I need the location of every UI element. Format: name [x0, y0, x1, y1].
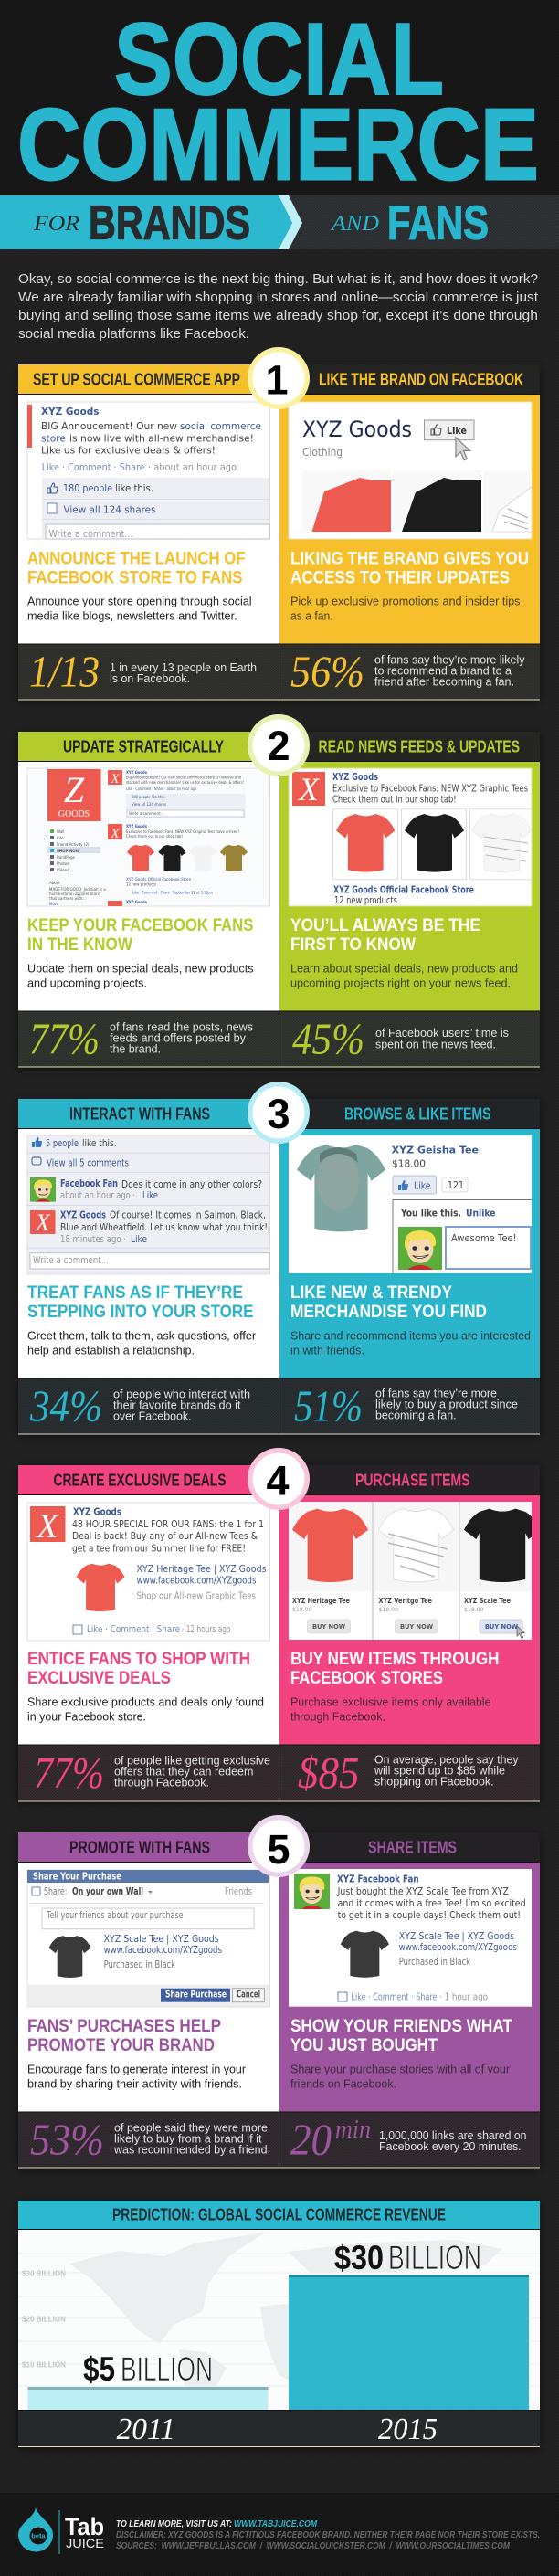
card: facebook post: Write a comment...	[49, 529, 133, 540]
card: news feed post: XYZ Goods Official Facebook Store	[333, 885, 474, 896]
card: share dialog: Share:	[44, 1886, 67, 1897]
text: share and recommend: Share and recommend items you are interested	[290, 1329, 531, 1343]
card: fan purchase story: Purchased in Black	[399, 1957, 471, 1968]
text: purchase exclusive items: through Facebook.	[290, 1710, 385, 1724]
stat: 20 min: 1,000,000 links are shared on	[379, 2129, 526, 2142]
heading: buy new items	[290, 1649, 499, 1688]
text: learn about deals: Learn about special deals, new products and	[290, 962, 518, 976]
card: facebook page thumbnail: Friend Activity (2)	[57, 842, 90, 847]
stat: 20 min: Facebook every 20 minutes.	[379, 2140, 522, 2153]
card: exclusive deal post: Deal is back! Buy any of our All-new Tees &	[72, 1531, 258, 1542]
text: share purchase stories: Share your purchase stories with all of your	[290, 2063, 511, 2076]
card: exclusive deal post: · 12 hours ago	[182, 1624, 230, 1635]
card: news feed post: Check them out in our shop tab!	[332, 794, 457, 805]
card: facebook post	[27, 402, 270, 540]
heading: buy new items: FACEBOOK STORES	[290, 1668, 443, 1688]
card: facebook page thumbnail: Z	[64, 769, 85, 810]
card: brand page with like button: XYZ Goods	[302, 417, 412, 442]
stat: 1/13: is on Facebook.	[110, 672, 190, 685]
text: learn about deals	[290, 962, 518, 990]
header: share items: SHARE ITEMS	[368, 1837, 457, 1856]
card: facebook post: like this.	[115, 483, 153, 494]
stat: 51%: 51%	[294, 1381, 363, 1431]
text: purchase exclusive items: Purchase exclusive items only available	[290, 1695, 491, 1709]
heading: entice fans	[27, 1649, 250, 1688]
card: exclusive deal post: 48 HOUR SPECIAL FOR OUR FANS: the 1 for 1	[72, 1519, 264, 1530]
card: store tees: BUY NOW	[485, 1623, 518, 1631]
text: greet them: Greet them, talk to them, ask questions, offer	[27, 1329, 257, 1343]
panel: step 4	[18, 1448, 541, 1803]
stat: $85: On average, people say they	[374, 1754, 519, 1767]
text: update them	[27, 962, 254, 990]
card: share dialog: www.facebook.com/XYZgoods	[104, 1945, 222, 1956]
text: purchase exclusive items	[290, 1695, 491, 1724]
card: facebook comments: Like	[131, 1234, 147, 1245]
chart axis labels: $30 BILLION	[22, 2269, 66, 2278]
stat: 77% exclusive offers	[34, 1747, 270, 1798]
card: facebook comments: 5 people	[46, 1138, 79, 1149]
card: facebook post: social commerce	[180, 421, 261, 432]
card: brand page with like button: Clothing	[302, 445, 343, 459]
text: share purchase stories	[290, 2063, 511, 2091]
card: fan purchase story: and it comes with a free Tee! I’m so excited	[338, 1898, 526, 1909]
card: fan purchase story: XYZ Facebook Fan	[337, 1874, 419, 1884]
heading: keep your fans in the know: KEEP YOUR FACEBOOK FANS	[27, 915, 254, 935]
card: facebook comments: like this.	[82, 1138, 117, 1149]
text: pick up promotions: as a fan.	[290, 609, 333, 623]
card: fan purchase story: XYZ Scale Tee | XYZ Goods	[399, 1931, 514, 1942]
card: share dialog: Share Your Purchase	[33, 1872, 121, 1883]
header: purchase items: PURCHASE ITEMS	[355, 1470, 469, 1489]
value: $30 billion: BILLION	[388, 2239, 481, 2276]
heading: entice fans: ENTICE FANS TO SHOP WITH	[27, 1649, 250, 1669]
heading: announce the launch: ANNOUNCE THE LAUNCH OF	[27, 548, 246, 568]
heading: show your friends: YOU JUST BOUGHT	[290, 2035, 438, 2055]
card: geisha tee product: XYZ Geisha Tee	[392, 1145, 479, 1156]
card: facebook page thumbnail: Wall	[57, 829, 64, 834]
stat: 20 min: min	[335, 2116, 371, 2144]
stat: 51%: of fans say they’re more	[375, 1387, 497, 1399]
card: share dialog: Share Purchase	[165, 1990, 227, 2001]
card: facebook post: Like · Comment · Share	[42, 462, 145, 473]
panel: step 2	[18, 714, 540, 1069]
card: facebook page thumbnail: stocked with new merchandise! Like us for exclusive deals & offers!	[126, 780, 244, 785]
banner: for brands and fans: FOR	[33, 212, 79, 235]
badge: step 1: 1	[265, 356, 289, 404]
card: geisha tee product: 121	[448, 1180, 464, 1191]
intro text: social media platforms like Facebook.	[18, 327, 249, 342]
text: encourage fans: Encourage fans to generate interest in your	[27, 2063, 247, 2076]
text: share exclusive products	[27, 1695, 264, 1724]
stat: 77% exclusive offers: offers that they can redeem	[114, 1766, 254, 1779]
panel: step 3	[18, 1082, 540, 1436]
card: share dialog: Tell your friends about your purchase	[46, 1910, 184, 1921]
card: fan purchase story: Like · Comment · Share	[351, 1991, 437, 2002]
card: facebook page thumbnail: Videos	[57, 868, 69, 872]
stat: 45%: spent on the news feed.	[375, 1038, 496, 1050]
icon: tab juice logo: Tab	[65, 2513, 104, 2540]
stat: 51%: becoming a fan.	[375, 1409, 457, 1421]
card: facebook post: 180 people	[63, 483, 112, 494]
stat: 1/13	[29, 647, 257, 697]
card: facebook comments: X	[35, 1209, 51, 1236]
card: store tees: $18.00	[464, 1606, 484, 1613]
card: fan purchase story	[289, 1869, 532, 2007]
badge: step 5: 5	[267, 1826, 290, 1873]
stat: 56%: friend after becoming a fan.	[374, 676, 514, 689]
heading: treat fans	[27, 1283, 254, 1322]
card: facebook page thumbnail: Like · Comment · Share · about an hour ago	[126, 787, 196, 791]
header: create exclusive deals: CREATE EXCLUSIVE DEALS	[53, 1470, 227, 1489]
card: facebook page thumbnail	[27, 768, 270, 906]
header: set up social commerce app: SET UP SOCIAL COMMERCE APP	[33, 369, 240, 388]
card: facebook page thumbnail: About	[49, 881, 60, 885]
text: announce store	[27, 595, 252, 623]
chart axis labels: $10 BILLION	[22, 2360, 66, 2370]
year row: 2015	[378, 2412, 438, 2446]
heading: liking the brand: LIKING THE BRAND GIVES YOU	[290, 548, 529, 568]
stat: $85: will spend up to $85 while	[374, 1765, 505, 1778]
value: $5 billion: $5	[83, 2350, 115, 2388]
card: facebook page thumbnail: XYZ Goods Official Facebook Store	[126, 877, 192, 882]
card: geisha tee product: Unlike	[466, 1209, 495, 1219]
card: facebook post: · about an hour ago	[148, 462, 237, 473]
card: facebook page thumbnail: Write a comment...	[129, 811, 163, 816]
card: news feed post: X	[297, 771, 321, 808]
card: facebook page thumbnail: Info	[57, 836, 64, 840]
badge: step 5	[248, 1815, 310, 1877]
text: share and recommend	[290, 1329, 531, 1357]
badge: step 4: 4	[266, 1458, 290, 1504]
stat: 1/13: 1 in every 13 people on Earth	[110, 661, 257, 674]
title	[17, 3, 539, 201]
stat: 77%: of fans read the posts, news	[110, 1021, 253, 1034]
badge: step 1	[248, 347, 310, 409]
bar: 2011	[27, 2387, 269, 2410]
card: facebook page thumbnail: Photos	[57, 861, 69, 866]
stat: $85	[298, 1747, 519, 1798]
chart background with world map	[18, 2229, 540, 2410]
footer text: WWW.TABJUICE.COM	[234, 2518, 317, 2529]
card: fan purchase story: · 1 hour ago	[439, 1991, 488, 2002]
bar: 2015	[289, 2275, 529, 2410]
heading: first to know	[290, 915, 480, 955]
header: interact with fans: INTERACT WITH FANS	[69, 1103, 210, 1123]
text: share purchase stories: friends on Facebook.	[290, 2077, 396, 2091]
value: $30 billion: $30	[334, 2239, 384, 2276]
panel: step 5	[18, 1815, 540, 2170]
stat: 77%: the brand.	[110, 1043, 161, 1056]
icon: tab juice logo: JUICE	[66, 2536, 104, 2550]
stat: 45%: of Facebook users’ time is	[375, 1027, 509, 1040]
card: store tees: BUY NOW	[312, 1623, 345, 1631]
card: facebook page thumbnail: humanitarian apparel brand	[49, 892, 101, 896]
heading: show your friends	[290, 2016, 512, 2055]
icon: tab juice logo	[18, 2507, 104, 2554]
card: exclusive deal post: www.facebook.com/XYZgoods	[137, 1575, 256, 1586]
chart axis labels	[22, 2269, 66, 2370]
card: exclusive deal post: XYZ Heritage Tee | XYZ Goods	[137, 1564, 267, 1575]
value: $30 billion	[334, 2239, 481, 2276]
text: announce store: media like blogs, newsletters and Twitter.	[27, 609, 237, 623]
card: store tees: $18.00	[378, 1606, 398, 1613]
card: exclusive deal post: X	[35, 1507, 59, 1546]
stat: 20 min: 20	[290, 2115, 332, 2165]
card: geisha tee product: $18.00	[392, 1159, 426, 1170]
header: prediction: PREDICTION: GLOBAL SOCIAL COMMERCE REVENUE	[112, 2205, 446, 2224]
stat: $85: shopping on Facebook.	[374, 1776, 494, 1789]
intro text	[18, 272, 538, 342]
text: update them: Update them on special deals, new products	[27, 962, 254, 976]
card: facebook comments	[27, 1135, 270, 1274]
card: facebook page thumbnail: that partners with...	[49, 896, 86, 901]
heading: announce the launch: FACEBOOK STORE TO FANS	[27, 567, 243, 587]
card: facebook page thumbnail: XYZ Goods	[126, 900, 148, 904]
stat: 45%	[292, 1014, 509, 1064]
card: exclusive deal post: XYZ Goods	[73, 1507, 121, 1518]
card: facebook post: XYZ Goods	[41, 406, 99, 417]
footer text: TO LEARN MORE, VISIT US AT:	[116, 2518, 232, 2529]
heading: entice fans: EXCLUSIVE DEALS	[27, 1668, 171, 1688]
card: store tees: $18.00	[292, 1606, 312, 1613]
card: fan purchase story: www.facebook.com/XYZgoods	[399, 1942, 517, 1953]
stat: 51%	[294, 1381, 518, 1431]
heading: keep your fans in the know: IN THE KNOW	[27, 934, 133, 955]
heading: fans purchases: PROMOTE YOUR BRAND	[27, 2035, 215, 2055]
icon: tab juice logo: beta	[31, 2532, 47, 2539]
text: update them: and upcoming projects.	[27, 977, 147, 990]
stat: 45%: 45%	[292, 1014, 364, 1064]
heading: fans purchases	[27, 2016, 221, 2055]
year row	[18, 2410, 540, 2447]
card: facebook page thumbnail: More	[49, 902, 58, 906]
card: geisha tee product	[289, 1135, 532, 1273]
text: pick up promotions: Pick up exclusive promotions and insider tips	[290, 595, 521, 608]
heading: first to know: YOU’LL ALWAYS BE THE	[290, 915, 480, 935]
heading: like new merchandise: LIKE NEW & TRENDY	[290, 1283, 452, 1303]
card: news feed post	[289, 768, 532, 906]
card: facebook comments: about an hour ago ·	[60, 1190, 135, 1201]
stat: 34%: over Facebook.	[113, 1410, 192, 1423]
text: pick up promotions	[290, 595, 521, 623]
stat: 53%: of people said they were more	[114, 2122, 268, 2135]
text: encourage fans: brand by sharing their activity with friends.	[27, 2077, 242, 2091]
card: facebook page thumbnail: Exclusive to Facebook Fans: NEW XYZ Graphic Tees have arrived!	[126, 829, 239, 834]
card: facebook page thumbnail: 180 people like this.	[132, 795, 165, 799]
heading: liking the brand	[290, 548, 529, 587]
stat: 53%: likely to buy from a brand if it	[114, 2133, 262, 2146]
stat: 53%	[30, 2115, 270, 2165]
stat: 56%: 56%	[290, 647, 364, 697]
stat: 34%: their favorite brands do it	[113, 1399, 241, 1412]
text: share exclusive products: Share exclusive products and deals only found	[27, 1695, 264, 1709]
stat: 20 min	[290, 2115, 526, 2165]
stat: 53%: was recommended by a friend.	[113, 2144, 270, 2157]
card: facebook comments: View all 5 comments	[47, 1158, 129, 1169]
heading: liking the brand: ACCESS TO THEIR UPDATES	[290, 567, 510, 587]
card: geisha tee product: Awesome Tee!	[451, 1233, 517, 1244]
stat: 51%: likely to buy a product since	[375, 1398, 518, 1410]
footer	[0, 2493, 559, 2576]
stat: 77%: feeds and offers posted by	[110, 1032, 247, 1045]
banner: for brands and fans: FANS	[387, 197, 489, 250]
value: $5 billion: BILLION	[121, 2350, 213, 2388]
card: facebook post: View all 124 shares	[64, 504, 155, 515]
stat: 77% exclusive offers: through Facebook.	[114, 1777, 209, 1789]
card: brand page with like button: Like	[447, 425, 467, 437]
intro text: buying and selling those same items we already shop for, except it’s done through	[18, 309, 538, 323]
heading: first to know: FIRST TO KNOW	[290, 934, 417, 955]
card: store tees	[289, 1502, 541, 1640]
card: facebook comments: Write a comment...	[33, 1255, 109, 1266]
card: exclusive deal post	[27, 1503, 270, 1641]
year row: 2011	[117, 2412, 175, 2446]
stat: 56%: of fans say they’re more likely	[374, 654, 525, 667]
card: share dialog: Purchased in Black	[104, 1959, 176, 1970]
card: share dialog: Cancel	[237, 1990, 260, 2001]
heading: fans purchases: FANS’ PURCHASES HELP	[27, 2016, 221, 2036]
text: learn about deals: upcoming projects right on your news feed.	[290, 977, 511, 990]
card: share dialog	[27, 1870, 270, 2007]
heading: like new merchandise	[290, 1283, 487, 1322]
panel: prediction revenue chart	[18, 2201, 540, 2449]
text: greet them	[27, 1329, 257, 1357]
panel: step 1	[18, 347, 540, 702]
text: share and recommend: in with friends.	[290, 1344, 364, 1357]
card: facebook post: is now live with all-new merchandise!	[69, 433, 254, 444]
header: promote with fans: PROMOTE WITH FANS	[69, 1837, 210, 1856]
card: facebook page thumbnail: X	[110, 772, 120, 787]
card: news feed post: 12 new products	[334, 895, 397, 906]
stat: 77%: 77%	[29, 1014, 100, 1064]
card: facebook page thumbnail: XYZ Goods	[126, 770, 148, 775]
footer text	[116, 2518, 540, 2551]
stat: $85: $85	[298, 1747, 360, 1798]
card: share dialog: On your own Wall	[72, 1886, 143, 1897]
stat: 77% exclusive offers: of people like getting exclusive	[114, 1755, 270, 1768]
heading: treat fans: TREAT FANS AS IF THEY’RE	[27, 1283, 243, 1303]
card: facebook page thumbnail: 12 new products	[126, 882, 156, 886]
stat: 53%: 53%	[30, 2115, 104, 2165]
card: facebook page thumbnail: Like · Comment · Share · September 22 at 3:18pm	[132, 891, 213, 895]
banner: for brands and fans: AND	[330, 212, 379, 235]
card: facebook comments: Does it come in any other colors?	[121, 1179, 262, 1190]
card: store tees: BUY NOW	[400, 1623, 433, 1631]
text: announce store: Announce your store opening through social	[27, 595, 252, 608]
card: store tees: XYZ Veritgo Tee	[378, 1597, 432, 1605]
stat: 34%	[29, 1381, 250, 1431]
card: facebook page thumbnail: BandPage	[57, 855, 75, 860]
stat: 34%: 34%	[29, 1381, 102, 1431]
card: facebook comments: Like	[142, 1190, 158, 1201]
card: brand page with like button	[289, 402, 532, 539]
card: facebook page thumbnail: X	[110, 827, 120, 841]
stat: 34%: of people who interact with	[113, 1388, 250, 1401]
card: geisha tee product: Like	[414, 1180, 431, 1191]
header: update strategically: UPDATE STRATEGICALLY	[63, 736, 224, 755]
card: share dialog: XYZ Scale Tee | XYZ Goods	[104, 1934, 219, 1945]
stat: 1/13: 1/13	[29, 647, 100, 697]
card: facebook page thumbnail: Check them out in our shop tab!	[126, 834, 183, 839]
heading: keep your fans in the know	[27, 915, 254, 955]
title: SOCIAL	[114, 3, 444, 116]
card: share dialog: Friends	[225, 1886, 252, 1897]
banner: for brands and fans: BRANDS	[89, 197, 250, 250]
card: fan purchase story: Just bought the XYZ Scale Tee from XYZ	[337, 1886, 509, 1897]
card: facebook page thumbnail: XYZ Goods	[126, 824, 148, 829]
stat: 56%	[290, 647, 525, 697]
card: facebook page thumbnail: GOODS	[58, 809, 90, 819]
card: facebook page thumbnail: Big Announcement! Our new social commerce store is now live and	[126, 776, 241, 780]
heading: like new merchandise: MERCHANDISE YOU FIND	[290, 1302, 487, 1322]
header: prediction	[18, 2201, 540, 2230]
stat: 56%: to recommend a brand to a	[374, 665, 512, 678]
text: greet them: help and establish a relationship.	[27, 1344, 195, 1357]
heading: buy new items: BUY NEW ITEMS THROUGH	[290, 1649, 499, 1669]
card: facebook comments: Blue and Wheatfield. Let us know what you think!	[60, 1222, 268, 1233]
card: news feed post: XYZ Goods	[332, 772, 378, 783]
intro text: Okay, so social commerce is the next big thing. But what is it, and how does it work?	[18, 272, 538, 287]
card: store tees: XYZ Heritage Tee	[292, 1597, 350, 1605]
heading: announce the launch	[27, 548, 246, 587]
header: browse and like items: BROWSE & LIKE ITEMS	[344, 1103, 491, 1123]
card: facebook post: store	[41, 433, 66, 444]
heading: show your friends: SHOW YOUR FRIENDS WHAT	[290, 2016, 512, 2036]
card: facebook comments: XYZ Goods	[60, 1210, 106, 1221]
card: facebook page thumbnail: View all 124 shares	[132, 802, 166, 807]
card: exclusive deal post: Like · Comment · Share	[87, 1624, 180, 1635]
badge: step 3: 3	[267, 1091, 290, 1137]
stat: 77%	[29, 1014, 253, 1064]
badge: step 3	[248, 1082, 310, 1144]
text: share exclusive products: in your Facebook store.	[27, 1710, 146, 1724]
card: facebook page thumbnail: SHOP NOW	[57, 849, 80, 853]
heading: treat fans: STEPPING INTO YOUR STORE	[27, 1302, 254, 1322]
card: facebook comments: Of course! It comes in Salmon, Black,	[110, 1210, 266, 1221]
card: exclusive deal post: Shop our All-new Graphic Tees	[137, 1590, 256, 1601]
card: fan purchase story: to get it in a couple days! Check them out!	[338, 1910, 521, 1921]
badge: step 2: 2	[267, 723, 290, 769]
card: facebook page thumbnail: MADE FOR GOOD: Jedidiah is a	[49, 887, 106, 892]
card: exclusive deal post: get a tee from our Summer line for FREE!	[72, 1543, 246, 1554]
text: encourage fans	[27, 2063, 247, 2091]
card: facebook post: Like us for exclusive deals & offers!	[41, 446, 216, 457]
card: facebook comments: 18 minutes ago ·	[60, 1234, 126, 1245]
badge: step 4	[248, 1448, 310, 1510]
chart axis labels: $20 BILLION	[22, 2315, 66, 2324]
intro text: We are already familiar with shopping in stores and online—social commerce is just	[18, 290, 538, 305]
badge: step 2	[248, 714, 310, 776]
card: store tees: XYZ Scale Tee	[464, 1597, 511, 1605]
value: $5 billion	[83, 2350, 213, 2388]
banner: for brands and fans	[0, 195, 559, 250]
card: facebook post: BIG Annoucement! Our new	[41, 421, 177, 432]
card: facebook comments: Facebook Fan	[60, 1178, 118, 1189]
card: geisha tee product: You like this.	[400, 1209, 461, 1219]
stat: 77% exclusive offers: 77%	[34, 1747, 104, 1798]
